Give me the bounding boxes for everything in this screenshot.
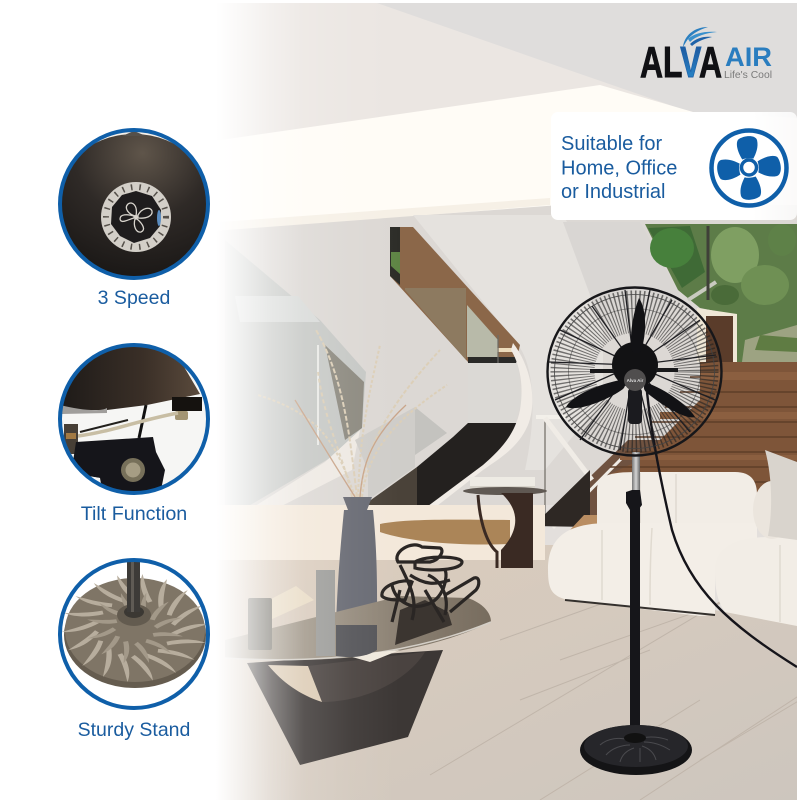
upper staircase opening <box>390 227 520 363</box>
wood stairs <box>610 308 797 500</box>
photo: stand base <box>62 562 206 688</box>
vase with branches <box>258 330 447 631</box>
callout text: Suitable for <box>561 133 663 155</box>
badge <box>624 369 646 391</box>
lower staircase glass <box>355 408 516 505</box>
wire sculpture <box>382 545 479 622</box>
power cord <box>647 392 797 667</box>
pole and base <box>580 452 692 775</box>
greenery outside <box>645 224 797 362</box>
coffee table <box>225 570 491 765</box>
left glass room <box>251 263 366 505</box>
sofa <box>548 450 797 626</box>
panel: tilt function <box>58 343 210 525</box>
far stairs left of sofa <box>536 415 660 530</box>
label: 3 Speed <box>98 287 170 309</box>
stand fan <box>548 288 722 775</box>
label: Tilt Function <box>81 503 187 525</box>
logo wings <box>683 27 717 47</box>
callout text: Home, Office <box>561 158 677 180</box>
wall under the stairs <box>238 206 797 330</box>
icon: fan <box>712 130 786 206</box>
photo: tilt joint <box>62 347 206 491</box>
blades <box>566 298 695 417</box>
callout: suitable for <box>551 112 797 220</box>
panel: 3 speed <box>58 128 210 308</box>
callout text: or Industrial <box>561 181 666 203</box>
stand fan: Alva Air <box>627 378 644 383</box>
logo wordmark: ALVA <box>640 38 722 87</box>
photo: speed dial <box>62 132 206 276</box>
floor <box>200 505 800 800</box>
curved stair stringer <box>430 343 532 505</box>
logo: Alva Air <box>640 27 772 87</box>
hub <box>612 342 658 388</box>
panel: sturdy stand <box>58 556 210 741</box>
logo: Alva Air: Life's Cool <box>724 69 772 81</box>
label: Sturdy Stand <box>78 719 190 741</box>
side table with books <box>463 477 547 568</box>
photo: living room scene <box>225 3 797 800</box>
motor stem <box>628 388 642 424</box>
ceiling <box>243 85 692 228</box>
logo: Alva Air: AIR <box>725 42 772 72</box>
fan guard <box>548 288 722 456</box>
